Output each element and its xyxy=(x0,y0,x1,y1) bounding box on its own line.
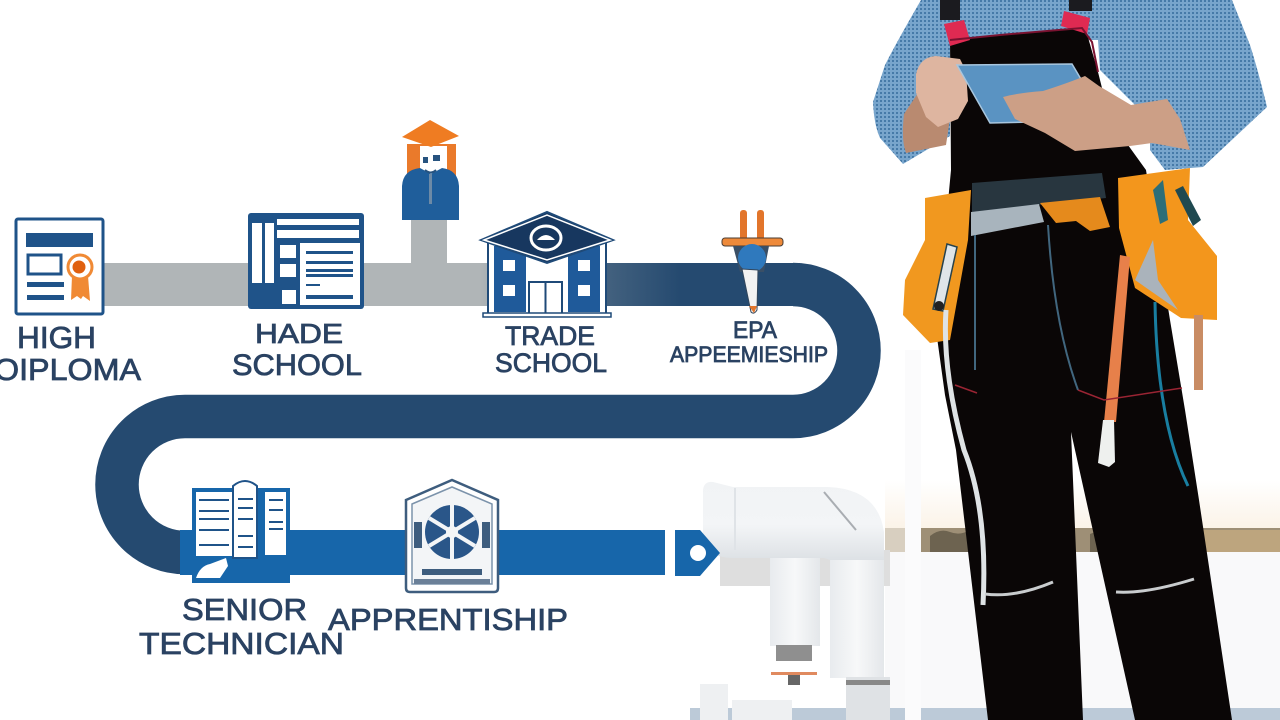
label: epa apprenticeship: EPA xyxy=(733,317,777,344)
label: trade school: TRADE xyxy=(505,321,595,351)
career path: grey to navy upper track xyxy=(100,220,800,306)
right tool pouch xyxy=(1118,168,1217,320)
hanging orange tool xyxy=(1104,255,1130,422)
label: high diploma xyxy=(0,320,141,387)
icon: epa tool xyxy=(722,210,783,313)
label: high diploma: HIGH xyxy=(17,320,96,355)
knee reflective strips xyxy=(985,579,1194,595)
label: trade school xyxy=(495,321,607,378)
label: apprentiship: APPRENTISHIP xyxy=(328,602,568,637)
right strap xyxy=(1061,0,1092,34)
icon: open manual xyxy=(192,481,290,583)
red stitching xyxy=(955,385,1182,400)
icon: trade school building xyxy=(481,212,613,317)
bib trim xyxy=(950,28,1098,72)
label: senior technician: SENIOR xyxy=(182,592,307,627)
icon: high school diploma xyxy=(16,219,103,314)
icon: graduate xyxy=(402,120,459,220)
belt clips xyxy=(1040,197,1110,231)
label: hade school xyxy=(232,318,362,382)
left hand xyxy=(916,56,968,127)
background scene: horizon and ground xyxy=(690,350,1280,720)
label: epa apprenticeship xyxy=(670,317,828,367)
label: epa apprenticeship: APPEEMIESHIP xyxy=(670,342,828,367)
career path: navy switchback xyxy=(117,284,859,552)
light belt xyxy=(971,204,1044,236)
side tool xyxy=(1194,315,1203,390)
right hand and forearm xyxy=(1003,76,1190,151)
label: senior technician: TECHNICIAN xyxy=(139,626,344,661)
grey cord xyxy=(945,310,984,605)
teal cord xyxy=(1155,302,1188,486)
label: senior technician xyxy=(139,592,344,661)
technician figure xyxy=(873,0,1267,720)
trousers and bib xyxy=(936,27,1232,720)
label: hade school: SCHOOL xyxy=(232,349,362,382)
white pipe assembly xyxy=(700,482,890,720)
left tool pouch xyxy=(903,190,971,343)
left strap xyxy=(940,0,970,46)
left forearm xyxy=(903,87,952,153)
tablet xyxy=(957,64,1088,123)
thin blue cords xyxy=(975,225,1078,390)
career path: blue lower track with arrow tip xyxy=(180,530,720,576)
label: trade school: SCHOOL xyxy=(495,348,607,378)
label: hade school: HADE xyxy=(255,318,343,349)
icon: certification badge xyxy=(406,480,498,592)
icon: book stack xyxy=(248,213,364,309)
dark waistband xyxy=(972,173,1106,212)
shirt xyxy=(873,0,1267,170)
